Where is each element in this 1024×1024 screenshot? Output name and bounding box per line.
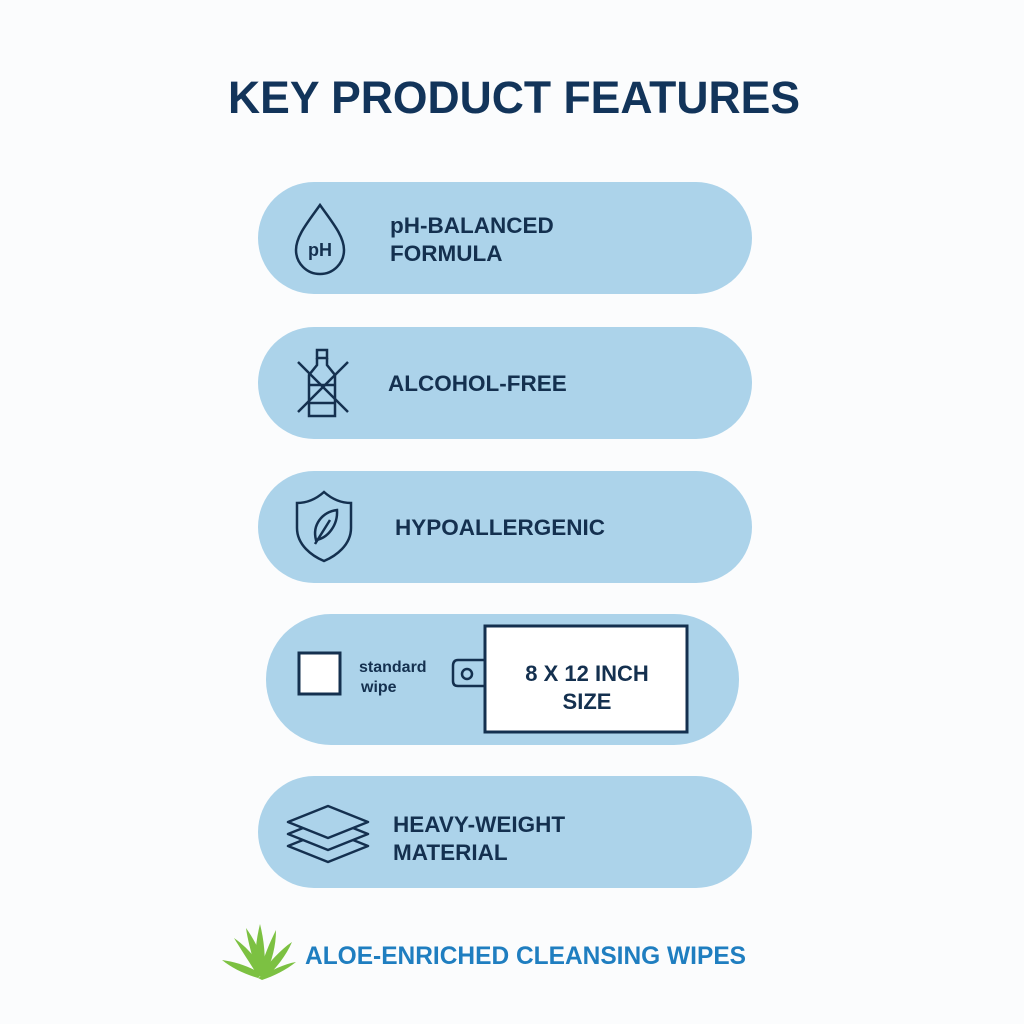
text: standard wipe: standard bbox=[359, 659, 427, 676]
text: alcohol-free: ALCOHOL-FREE bbox=[388, 371, 567, 396]
icon: tape measure bbox=[453, 660, 485, 686]
text: hypoallergenic: HYPOALLERGENIC bbox=[395, 515, 605, 540]
icon: pH drop: pH bbox=[308, 240, 332, 260]
text: heavy-weight material: MATERIAL bbox=[393, 840, 508, 865]
icon: pH drop bbox=[296, 205, 344, 274]
text: heavy-weight material: HEAVY-WEIGHT bbox=[393, 812, 565, 837]
text: pH-balanced formula: pH-BALANCED bbox=[390, 213, 554, 238]
title: KEY PRODUCT FEATURES bbox=[228, 72, 800, 123]
panel: pH-balanced bbox=[258, 182, 752, 294]
icon: shield leaf bbox=[297, 492, 351, 561]
size box: 8 X 12 INCH bbox=[525, 661, 649, 686]
text: footer: ALOE-ENRICHED CLEANSING WIPES bbox=[305, 942, 746, 970]
icon: aloe bbox=[222, 924, 296, 980]
text: pH-balanced formula: FORMULA bbox=[390, 241, 502, 266]
icon: layers bbox=[288, 806, 368, 862]
panel: size bbox=[266, 614, 739, 745]
footer bbox=[222, 924, 746, 980]
size box bbox=[485, 626, 687, 732]
panel: heavy-weight bbox=[258, 776, 752, 888]
size box: SIZE bbox=[563, 689, 611, 714]
icon: standard wipe square bbox=[299, 653, 340, 694]
panel: alcohol-free bbox=[258, 327, 752, 439]
panel: hypoallergenic bbox=[258, 471, 752, 583]
text: standard wipe: wipe bbox=[360, 679, 397, 696]
icon: crossed bottle bbox=[298, 350, 348, 416]
